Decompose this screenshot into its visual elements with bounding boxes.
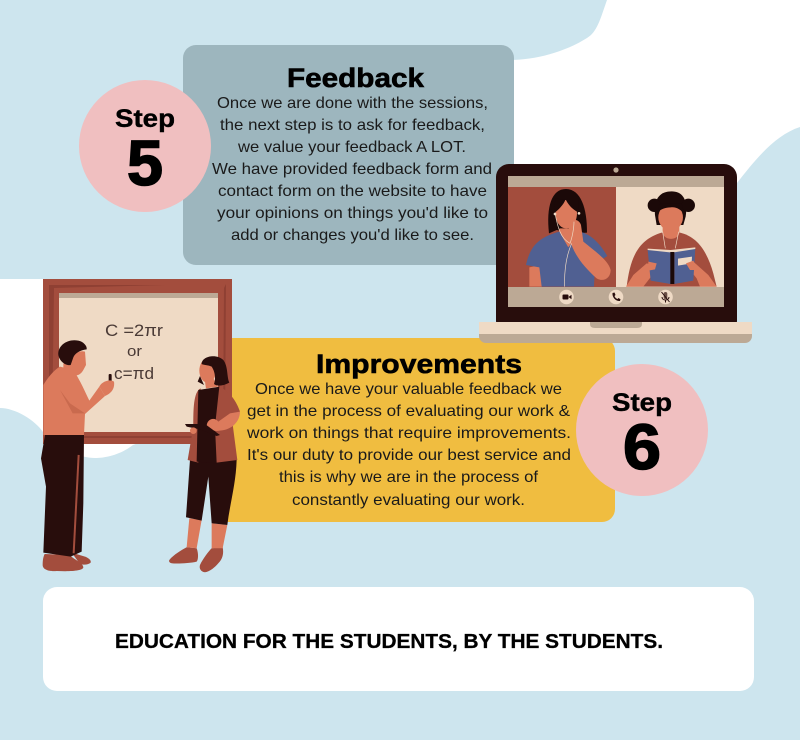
icon: muted microphone [658, 290, 673, 304]
panel: tagline [43, 587, 754, 691]
text block: feedback description [212, 95, 492, 244]
badge: step 6: 6 [623, 411, 661, 483]
text block: improvements description: this is why we are in the process of [279, 469, 539, 486]
text block: improvements description: get in the process of evaluating our work & [247, 403, 570, 420]
illustration: laptop video call [479, 164, 752, 343]
icon: phone [609, 290, 623, 304]
panel: improvements [215, 338, 615, 522]
formulas: c=πd [114, 364, 154, 383]
heading: Improvements: Improvements [316, 349, 522, 379]
panel: feedback [183, 45, 514, 265]
figure: woman with earphones [526, 189, 611, 287]
text block: feedback description: the next step is to ask for feedback, [220, 117, 485, 134]
panel: tagline: EDUCATION FOR THE STUDENTS, BY THE STUDENTS. [115, 631, 663, 653]
formulas: C =2πr [105, 321, 163, 340]
text block: feedback description: add or changes you'd like to see. [231, 227, 474, 244]
badge: step 5: 5 [127, 127, 163, 199]
badge: step 5 [79, 80, 211, 212]
illustration: whiteboard with formulas [43, 279, 232, 444]
badge: step 6: Step [612, 389, 672, 417]
badge: step 5: Step [115, 105, 175, 133]
formulas: or [127, 343, 142, 360]
text block: feedback description: Once we are done with the sessions, [217, 95, 488, 112]
formulas [105, 321, 163, 383]
text block: improvements description: work on things that require improvements. [246, 425, 571, 442]
text block: feedback description: your opinions on things you'd like to [217, 205, 488, 222]
figure: man writing on board [41, 340, 114, 571]
text block: improvements description: constantly evaluating our work. [292, 492, 525, 509]
text block: improvements description: It's our duty to provide our best service and [247, 447, 571, 464]
badge: step 6 [576, 364, 708, 496]
text block: feedback description: contact form on the website to have [218, 183, 487, 200]
text block: feedback description: we value your feedback A LOT. [237, 139, 466, 156]
figure: girl reading book [626, 191, 717, 287]
heading: Feedback: Feedback [287, 63, 425, 93]
figure: woman with tablet [169, 356, 240, 572]
text block: feedback description: We have provided feedback form and [212, 161, 492, 178]
icon: video camera [559, 290, 574, 304]
text block: improvements description: Once we have your valuable feedback we [255, 381, 562, 398]
text block: improvements description [246, 381, 571, 509]
